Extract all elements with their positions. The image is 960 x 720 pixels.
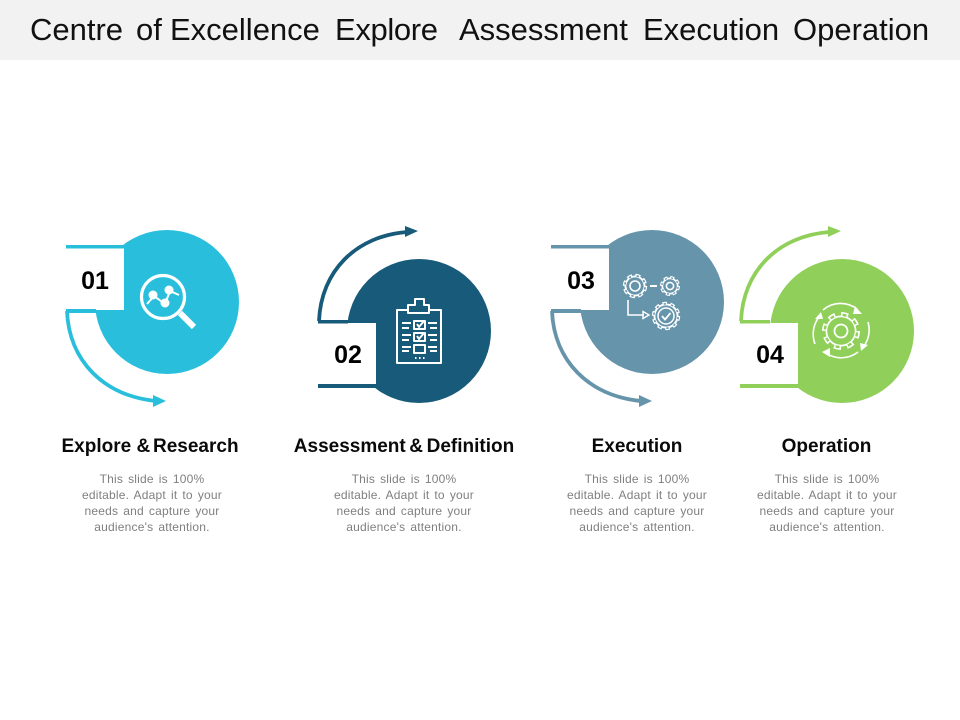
text block 03: This slide is 100% [585, 472, 690, 486]
text block 04: audience's attention. [769, 520, 885, 534]
circle 01 [95, 230, 239, 374]
arrow 04 [741, 226, 841, 321]
number tab 04 [740, 320, 798, 388]
text block 02: audience's attention. [346, 520, 462, 534]
arrow 01 [67, 311, 166, 407]
heading 03: Execution [592, 436, 682, 457]
text block 03: needs and capture your [570, 504, 704, 518]
number tab 01 [66, 245, 124, 313]
icon: magnifier with data points [142, 276, 194, 327]
title: Operation [793, 12, 929, 47]
number tab 03: 03 [567, 267, 595, 295]
text block 01: editable. Adapt it to your [82, 488, 222, 502]
heading 01: Explore [62, 436, 131, 457]
step 03: execution [551, 230, 724, 534]
heading 01: & [136, 436, 150, 457]
number tab 01: 01 [81, 267, 109, 295]
text block 02: editable. Adapt it to your [334, 488, 474, 502]
text block 01: This slide is 100% [100, 472, 205, 486]
text block 03: editable. Adapt it to your [567, 488, 707, 502]
heading 01: Research [153, 436, 239, 457]
title: Execution [643, 12, 779, 47]
number tab 02: 02 [334, 341, 362, 369]
icon: checklist clipboard [397, 299, 441, 363]
title: Excellence [170, 12, 320, 47]
title band [0, 0, 960, 60]
step 04: operation [740, 226, 914, 534]
number tab 04: 04 [756, 341, 784, 369]
text block 03: audience's attention. [579, 520, 695, 534]
text block 01: audience's attention. [94, 520, 210, 534]
text block 02: needs and capture your [336, 504, 472, 518]
heading 04: Operation [782, 436, 871, 457]
title: Assessment [459, 12, 628, 47]
text block 02: This slide is 100% [352, 472, 457, 486]
text block 04: needs and capture your [760, 504, 894, 518]
circle 02 [347, 259, 491, 403]
title: of [136, 12, 162, 47]
step 01: explore and research [62, 230, 239, 534]
arrow 02 [319, 226, 418, 321]
number tab 03 [551, 245, 609, 313]
step 02: assessment and definition [294, 226, 514, 534]
icon: gear with cycle arrows [813, 303, 869, 358]
circle 03 [580, 230, 724, 374]
circle 04 [770, 259, 914, 403]
text block 01: needs and capture your [84, 504, 220, 518]
text block 04: This slide is 100% [775, 472, 880, 486]
number tab 02 [318, 320, 376, 388]
heading 02: Assessment & Definition [294, 436, 514, 457]
arrow 03 [552, 311, 652, 407]
title: Centre [30, 12, 123, 47]
icon: gears process [624, 276, 678, 328]
title: Explore [335, 12, 438, 47]
text block 04: editable. Adapt it to your [757, 488, 897, 502]
